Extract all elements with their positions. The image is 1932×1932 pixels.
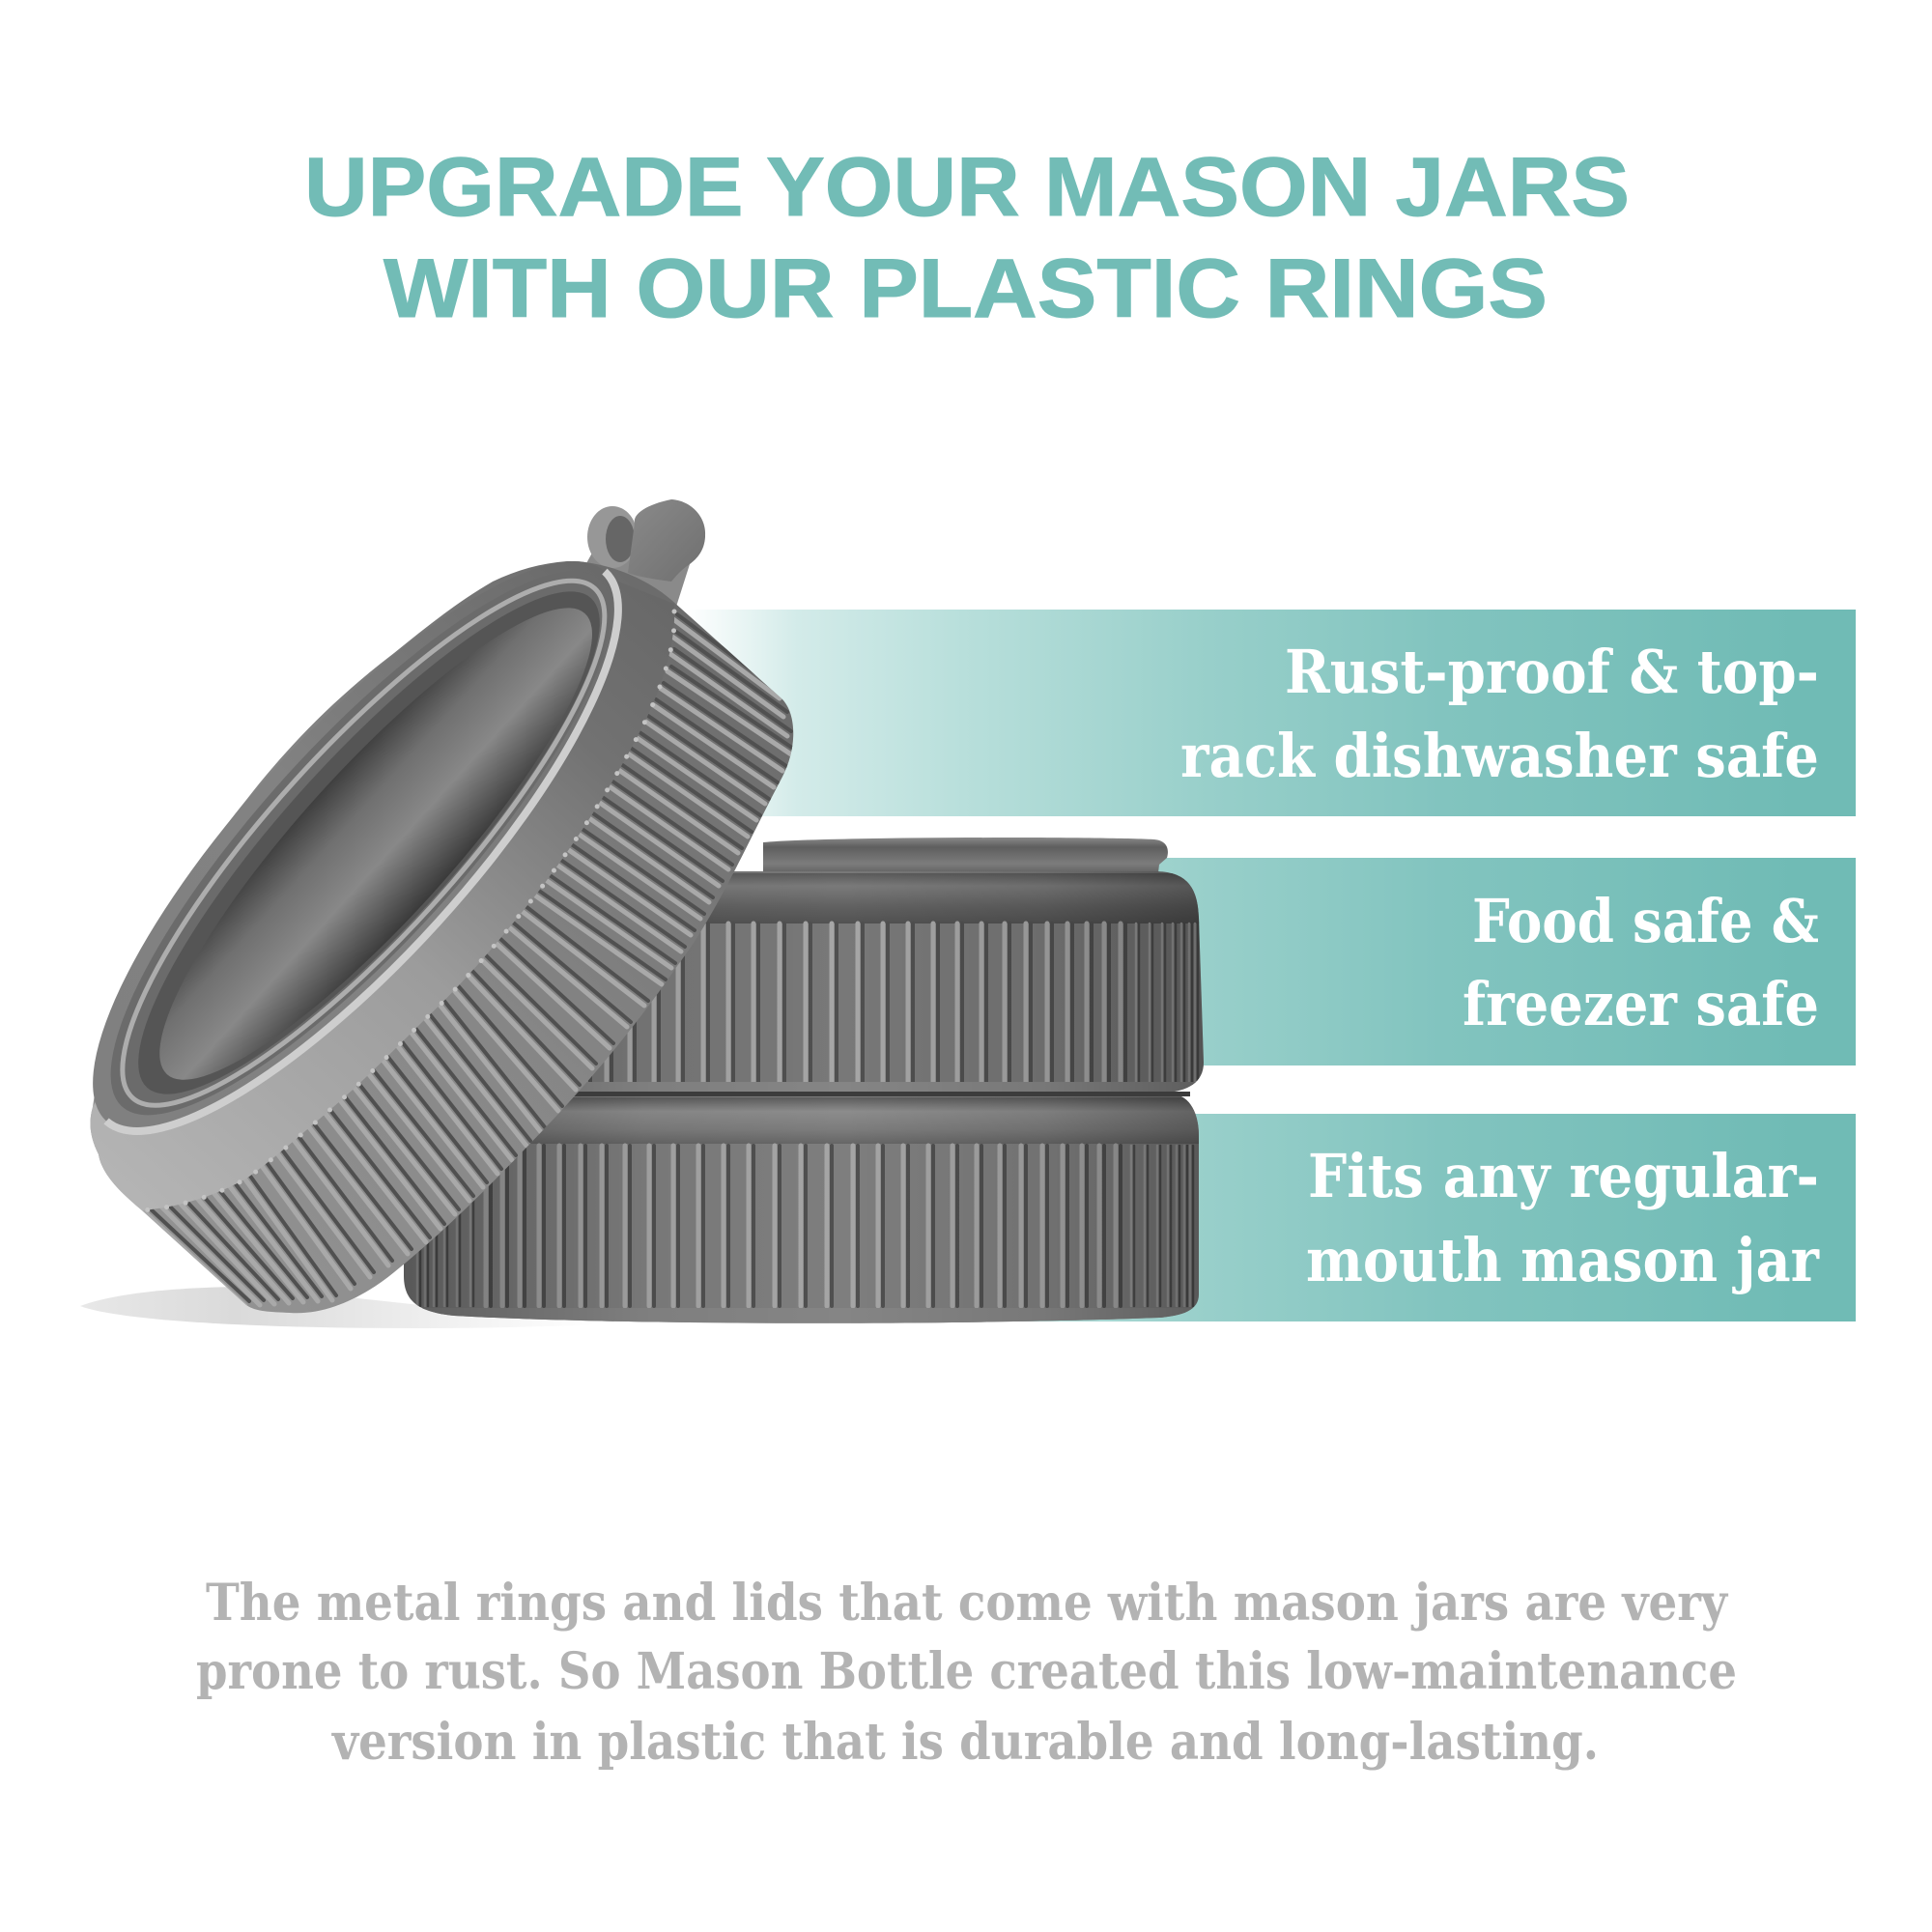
title: [304, 141, 1630, 335]
icon: bottom plastic ring: [404, 1094, 1199, 1325]
panel: rust-proof feature text: Rust-proof & top-: [1285, 637, 1819, 707]
panel: fits jar feature text: [1306, 1141, 1820, 1295]
panel: food safe feature text: Food safe &: [1472, 886, 1819, 956]
panel: feature bar backgrounds: [676, 610, 1856, 1321]
panel: rust-proof feature text: rack dishwasher safe: [1180, 721, 1819, 791]
rim and opening of tilted ring: [23, 497, 688, 1196]
panel: rust-proof feature text: [1180, 637, 1819, 791]
icon: tilted plastic ring: [91, 561, 794, 1314]
panel: food safe feature text: freezer safe: [1463, 969, 1819, 1039]
panel: fits jar feature text: mouth mason jar: [1306, 1225, 1820, 1295]
panel: fits jar feature text: Fits any regular-: [1308, 1141, 1819, 1211]
smooth band of tilted ring: [91, 562, 674, 1210]
icon: hinge tab of tilted ring: [585, 499, 705, 607]
title: UPGRADE YOUR MASON JARS: [304, 141, 1630, 234]
panel: food safe feature text: [1463, 886, 1819, 1039]
title: WITH OUR PLASTIC RINGS: [384, 242, 1548, 335]
ground shadow: [80, 1287, 599, 1328]
text block: description: The metal rings and lids that come with mason jars are very: [206, 1574, 1729, 1633]
icon: middle plastic ring with neck: [574, 838, 1204, 1096]
text block: description: prone to rust. So Mason Bottle created this low-maintenance: [196, 1642, 1737, 1701]
ribs of tilted ring: [144, 614, 795, 1306]
text block: description: version in plastic that is durable and long-lasting.: [331, 1713, 1599, 1772]
text block: description: [196, 1574, 1737, 1772]
